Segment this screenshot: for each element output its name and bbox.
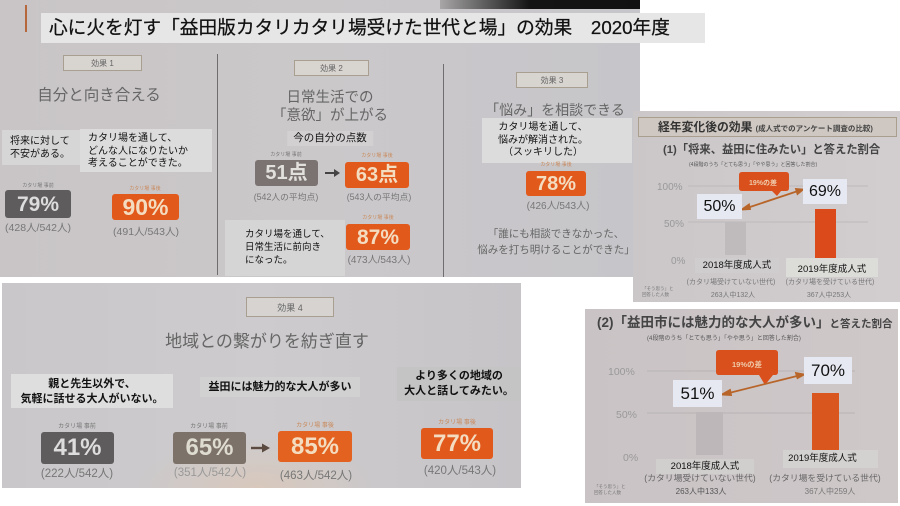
- heading: effect 4: 地域との繋がりを紡ぎ直す: [165, 332, 369, 351]
- caption: 426 of 543: (426人/543人): [527, 201, 589, 212]
- stat: 51 points: 51点: [265, 162, 308, 184]
- heading: effect 3: 「悩み」を相談できる: [485, 102, 625, 118]
- value label: 70%: [804, 357, 852, 384]
- stat: 85%: 85%: [291, 432, 339, 460]
- axis label: 100%: 100%: [608, 366, 635, 378]
- text: thinking about who to become: どんな人になりたいか: [88, 146, 188, 156]
- stat: 41%: カタリ場 事前: [58, 424, 96, 430]
- axis label: 100%: 100%: [657, 182, 683, 193]
- chart title: (1)「将来、益田に住みたい」と答えた割合: [663, 144, 880, 156]
- note: respondents: [594, 484, 626, 495]
- caption: 543 average: (543人の平均点): [347, 192, 411, 202]
- title: 心に火を灯す「益田版カタリカタリ場受けた世代と場」の効果 2020年度: [49, 17, 670, 38]
- badge: effect 1: 効果 1: [91, 58, 114, 68]
- callout: 19% difference: [739, 172, 789, 196]
- value label: 69%: 69%: [809, 183, 841, 200]
- badge: effect 2: [294, 60, 369, 76]
- heading: effect 1: 自分と向き合える: [37, 87, 161, 104]
- top dark edge: [440, 0, 640, 9]
- stat: 90%: [112, 185, 179, 220]
- stat: 65%: [173, 422, 246, 464]
- stat: 79%: カタリ場 事前: [22, 183, 54, 189]
- panel: effect 3: [477, 72, 635, 256]
- text: thinking about who to become: カタリ場を通して、: [88, 133, 177, 144]
- stat: 63 points: 63点: [356, 164, 398, 186]
- bar: 2019: [812, 393, 839, 450]
- caption: 222 of 542: (222人/542人): [41, 468, 113, 480]
- callout: 19% difference: 19%の差: [749, 178, 777, 187]
- text: positive about daily life: [225, 220, 345, 276]
- chart subtitle: (4段階のうち「とても思う」「やや思う」と回答した割合): [647, 336, 801, 342]
- caption: Katariba generation: (カタリ場を受けている世代): [786, 279, 874, 286]
- stat: 63 points: カタリ場 事後: [361, 153, 393, 159]
- arrow: 65% to 85%: [251, 444, 270, 452]
- divider: effects 1 and 2: [217, 54, 218, 275]
- value label: 70%: 70%: [811, 361, 845, 380]
- value label: 51%: [673, 380, 722, 407]
- caption: 473 of 543: (473人/543人): [348, 255, 410, 266]
- heading: effect 2: 「意欲」が上がる: [272, 108, 388, 124]
- arrow: 50% to 69%: [742, 189, 803, 210]
- text: many attractive adults in Masuda: 益田には魅力的な大人が多い: [208, 381, 352, 393]
- label: 2018 coming-of-age ceremony: [656, 459, 754, 474]
- heading: effect 2: 日常生活での: [286, 90, 374, 106]
- value label: 51%: 51%: [680, 384, 715, 403]
- label: 2019 coming-of-age ceremony: 2019年度成人式: [798, 264, 866, 275]
- caption: 491 of 543: (491人/543人): [113, 226, 179, 238]
- text: could open up about worries: 悩みを打ち明けることができた」: [477, 244, 635, 256]
- panel: effect 4: [2, 283, 521, 488]
- panel: top slide effects 1 to 3: [0, 0, 640, 277]
- text: positive about daily life: カタリ場を通して、: [245, 229, 330, 240]
- count: 132 of 263: 263人中132人: [711, 292, 755, 299]
- accent line: [25, 5, 27, 32]
- badge: effect 3: 効果 3: [541, 76, 563, 84]
- panel: yearly change chart 1: [633, 111, 900, 302]
- arrow: 51% to 70%: [722, 373, 804, 395]
- chart title: (2)「益田市には魅力的な大人が多い」と答えた割合: [597, 315, 892, 330]
- text: thinking about who to become: [80, 129, 212, 172]
- text: worries resolved: [482, 118, 632, 163]
- header: effect after years: 経年変化後の効果 (成人式でのアンケート調査の比較): [658, 120, 873, 134]
- stat: 77%: カタリ場 事後: [438, 420, 476, 426]
- text: worries resolved: 悩みが解消された。: [498, 134, 588, 146]
- stat: 79%: [5, 182, 71, 218]
- chart subtitle: (4段階のうち「とても思う」「やや思う」と回答した割合): [689, 162, 817, 168]
- badge: effect 4: [246, 297, 334, 317]
- text: no adults to talk to: 親と先生以外で、: [48, 378, 136, 390]
- label: 2018 coming-of-age ceremony: 2018年度成人式: [703, 260, 771, 271]
- value label: 50%: 50%: [703, 198, 736, 215]
- axis label: 50%: 50%: [664, 219, 684, 230]
- caption: 428 of 542: (428人/542人): [5, 222, 71, 234]
- stat: 65%: カタリ場 事前: [190, 424, 228, 430]
- label: 2019 coming-of-age ceremony: [783, 450, 878, 468]
- caption: 542 average: (542人の平均点): [254, 192, 318, 202]
- text: anxiety about the future: 将来に対して: [10, 136, 70, 147]
- stat: 87%: 87%: [357, 226, 399, 248]
- note: respondents: 回答した人数: [594, 490, 621, 495]
- badge: effect 2: 効果 2: [320, 64, 343, 72]
- stat: 78%: 78%: [536, 172, 576, 194]
- text: anxiety about the future: [2, 130, 81, 165]
- bar: 2018: [696, 412, 723, 455]
- label: 2018 coming-of-age ceremony: [695, 258, 779, 273]
- callout: 19% difference: [716, 350, 778, 385]
- axis label: 0%: 0%: [623, 452, 638, 464]
- text: positive about daily life: になった。: [245, 255, 293, 266]
- text: could open up about worries: [477, 228, 635, 256]
- stat: 90%: 90%: [122, 194, 169, 220]
- stat: 87%: [346, 214, 410, 250]
- text: anxiety about the future: 不安がある。: [10, 149, 70, 160]
- text: want to talk to more adults: [397, 367, 521, 401]
- text: positive about daily life: 日常生活に前向き: [245, 242, 321, 253]
- stat: 79%: 79%: [17, 192, 59, 216]
- header: effect after years: [638, 117, 897, 137]
- stat: 87%: カタリ場 事後: [362, 215, 394, 221]
- stat: 51 points: [255, 151, 318, 186]
- label: 2018 coming-of-age ceremony: 2018年度成人式: [671, 461, 739, 472]
- count: 253 of 367: 367人中253人: [807, 292, 851, 299]
- text: no adults to talk to: 気軽に話せる大人がいない。: [20, 393, 164, 405]
- value label: 69%: [803, 179, 847, 204]
- arrow: 51 to 63: [325, 169, 340, 177]
- stat: 41%: [41, 422, 114, 464]
- panel: effect 1: [2, 55, 212, 238]
- badge: effect 3: [516, 72, 588, 88]
- text: could open up about worries: 「誰にも相談できなかった、: [488, 228, 624, 240]
- badge: effect 4: 効果 4: [277, 302, 303, 312]
- caption: no Katariba generation: (カタリ場受けていない世代): [687, 279, 775, 286]
- badge: effect 1: [63, 55, 142, 71]
- text: worries resolved: カタリ場を通して、: [498, 122, 588, 133]
- divider: effects 2 and 3: [443, 64, 444, 277]
- callout: 19% difference: 19%の差: [732, 359, 763, 369]
- panel: effect 2: [225, 60, 411, 276]
- title: [41, 13, 705, 43]
- stat: 78%: カタリ場 事後: [540, 162, 572, 168]
- text: many attractive adults in Masuda: [200, 377, 360, 397]
- text: worries resolved: （スッキリした）: [503, 147, 583, 158]
- caption: no Katariba generation: (カタリ場受けていない世代): [644, 473, 756, 483]
- caption: Katariba generation: (カタリ場を受けている世代): [769, 473, 881, 483]
- note: respondents: 「そう思う」と: [642, 286, 674, 291]
- axis label: 0%: 0%: [671, 256, 686, 267]
- caption: 420 of 543: (420人/543人): [424, 465, 496, 477]
- bar chart: [657, 172, 868, 267]
- stat: 41%: 41%: [53, 434, 102, 461]
- stat: 51 points: カタリ場 事前: [270, 152, 302, 158]
- heading: effect 2: [272, 89, 388, 124]
- label: 2019 coming-of-age ceremony: 2019年度成人式: [788, 453, 857, 464]
- label: 2019 coming-of-age ceremony: [786, 258, 878, 277]
- bar: 2019: [815, 209, 836, 258]
- bar chart: [608, 350, 855, 464]
- text: want to talk to more adults: 大人と話してみたい。: [404, 385, 514, 397]
- stat: 85%: カタリ場 事後: [296, 423, 334, 429]
- stat: 65%: 65%: [185, 434, 234, 461]
- value label: 50%: [697, 194, 742, 219]
- count: 259 of 367: 367人中259人: [805, 487, 855, 496]
- panel: yearly change chart 2: [585, 309, 898, 503]
- stat: 85%: [278, 422, 352, 462]
- note: respondents: 回答した人数: [642, 292, 669, 297]
- text: current self score: 今の自分の点数: [293, 132, 367, 144]
- stat: 77%: 77%: [433, 430, 481, 456]
- caption: 351 of 542: (351人/542人): [174, 467, 246, 479]
- stat: 77%: [421, 418, 493, 459]
- text: thinking about who to become: 考えることができた。: [88, 158, 188, 169]
- caption: 463 of 542: (463人/542人): [280, 470, 352, 482]
- text: want to talk to more adults: より多くの地域の: [415, 370, 503, 382]
- count: 133 of 263: 263人中133人: [676, 487, 726, 496]
- axis label: 50%: 50%: [616, 409, 637, 421]
- note: respondents: [642, 286, 674, 297]
- text: no adults to talk to: [11, 374, 173, 408]
- note: respondents: 「そう思う」と: [594, 484, 626, 489]
- stat: 90%: カタリ場 事後: [129, 186, 161, 192]
- stat: 63 points: [345, 152, 409, 188]
- stat: 78%: [526, 161, 586, 196]
- bar: 2018: [725, 222, 746, 255]
